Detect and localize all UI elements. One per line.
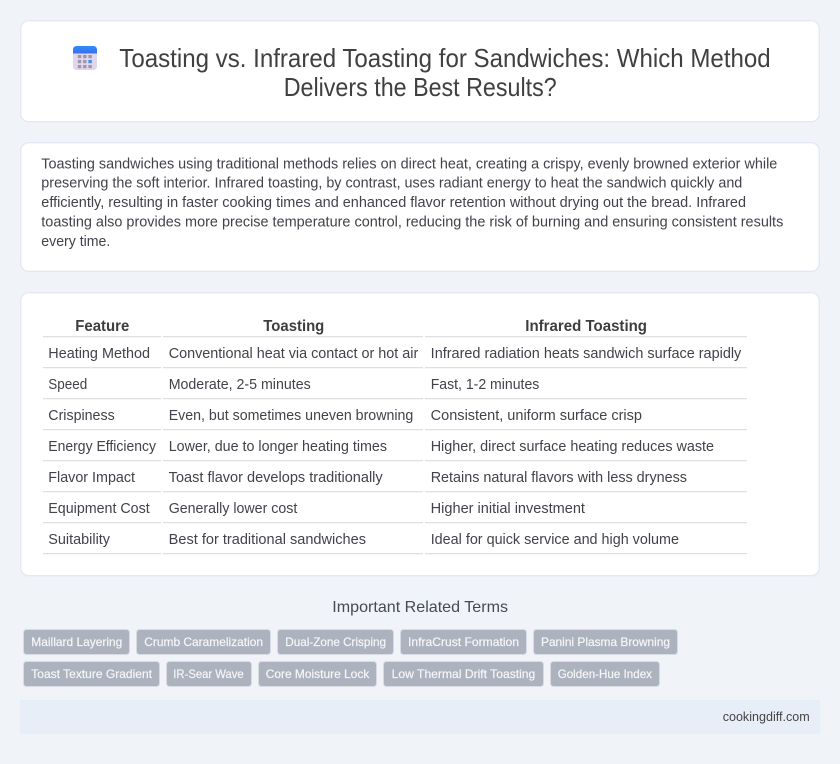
row: suitability <box>48 532 679 548</box>
row: energy efficiency: Higher, direct surface heating reduces waste <box>431 439 714 455</box>
footer bar <box>20 700 820 734</box>
icon: calendar <box>73 46 97 70</box>
table header row: Feature <box>75 318 129 335</box>
tag: Low Thermal Drift Toasting: Low Thermal Drift Toasting <box>392 667 535 681</box>
tag list: related terms <box>24 630 678 686</box>
table header row: Toasting <box>263 318 324 335</box>
heading: important related terms: Important Related Terms <box>332 599 508 616</box>
table header row: Infrared Toasting <box>525 318 647 335</box>
text block: summary: efficiently, resulting in faster cooking times and enhanced flavor retention without drying out the bread. Infrared <box>41 195 746 211</box>
row: equipment cost: Generally lower cost <box>169 501 297 517</box>
text block: summary: preserving the soft interior. Infrared toasting, by contrast, uses radiant energy to heat the sandwich quickly and <box>41 176 742 192</box>
row: energy efficiency <box>48 439 714 455</box>
text block: summary: toasting also provides more precise temperature control, reducing the risk of burning and ensuring consistent results <box>41 214 783 230</box>
tag: Low Thermal Drift Toasting <box>384 662 544 686</box>
row: speed <box>48 377 539 393</box>
row: suitability: Best for traditional sandwiches <box>169 532 366 548</box>
text block: summary: every time. <box>41 234 110 250</box>
title: Delivers the Best Results? <box>284 74 557 102</box>
text block: summary: Toasting sandwiches using traditional methods relies on direct heat, creating a crispy, evenly browned exterior while <box>41 156 777 172</box>
row: crispiness <box>48 408 642 424</box>
tag: Dual-Zone Crisping: Dual-Zone Crisping <box>285 635 386 649</box>
row: flavor impact: Toast flavor develops traditionally <box>169 470 384 486</box>
row: speed: Moderate, 2-5 minutes <box>169 377 311 393</box>
row: heating method: Conventional heat via contact or hot air <box>169 346 419 362</box>
tag: Crumb Caramelization <box>136 630 270 654</box>
row: heating method <box>48 346 742 362</box>
tag: Panini Plasma Browning: Panini Plasma Browning <box>541 635 670 649</box>
table header row <box>75 318 647 335</box>
row: energy efficiency: Energy Efficiency <box>48 439 157 455</box>
row: crispiness: Crispiness <box>48 408 115 424</box>
row: equipment cost: Higher initial investment <box>431 501 585 517</box>
row: equipment cost: Equipment Cost <box>48 501 150 517</box>
tag: Core Moisture Lock: Core Moisture Lock <box>266 667 370 681</box>
tag: Panini Plasma Browning <box>534 630 678 654</box>
tag: Maillard Layering: Maillard Layering <box>31 635 122 649</box>
row: energy efficiency: Lower, due to longer heating times <box>169 439 387 455</box>
row: flavor impact <box>48 470 687 486</box>
tag: Crumb Caramelization: Crumb Caramelization <box>144 635 263 649</box>
tag: InfraCrust Formation <box>400 630 526 654</box>
tag: IR-Sear Wave <box>166 662 252 686</box>
row: speed: Fast, 1-2 minutes <box>431 377 539 393</box>
row: flavor impact: Retains natural flavors with less dryness <box>431 470 687 486</box>
title <box>119 45 771 102</box>
panel: title header <box>21 21 819 122</box>
row: crispiness: Consistent, uniform surface crisp <box>431 408 642 424</box>
tag: Toast Texture Gradient <box>24 662 160 686</box>
row: speed: Speed <box>48 377 87 393</box>
tag: InfraCrust Formation: InfraCrust Formation <box>408 635 519 649</box>
tag: Golden-Hue Index: Golden-Hue Index <box>558 667 652 681</box>
row: heating method: Heating Method <box>48 346 150 362</box>
tag: IR-Sear Wave: IR-Sear Wave <box>173 667 244 681</box>
tag: Dual-Zone Crisping <box>278 630 394 654</box>
tag: Core Moisture Lock <box>258 662 376 686</box>
panel: summary paragraph <box>21 143 819 271</box>
row: suitability: Suitability <box>48 532 111 548</box>
panel: comparison table <box>21 293 819 576</box>
row: flavor impact: Flavor Impact <box>48 470 135 486</box>
row: suitability: Ideal for quick service and high volume <box>431 532 679 548</box>
tag: Toast Texture Gradient: Toast Texture Gradient <box>31 667 153 681</box>
title: Toasting vs. Infrared Toasting for Sandwiches: Which Method <box>119 45 771 73</box>
row: crispiness: Even, but sometimes uneven browning <box>169 408 413 424</box>
footer: site name: cookingdiff.com <box>723 709 810 724</box>
row: heating method: Infrared radiation heats sandwich surface rapidly <box>431 346 742 362</box>
tag: Golden-Hue Index <box>550 662 660 686</box>
tag: Maillard Layering <box>24 630 130 654</box>
text block: summary <box>41 156 783 250</box>
row: equipment cost <box>48 501 585 517</box>
